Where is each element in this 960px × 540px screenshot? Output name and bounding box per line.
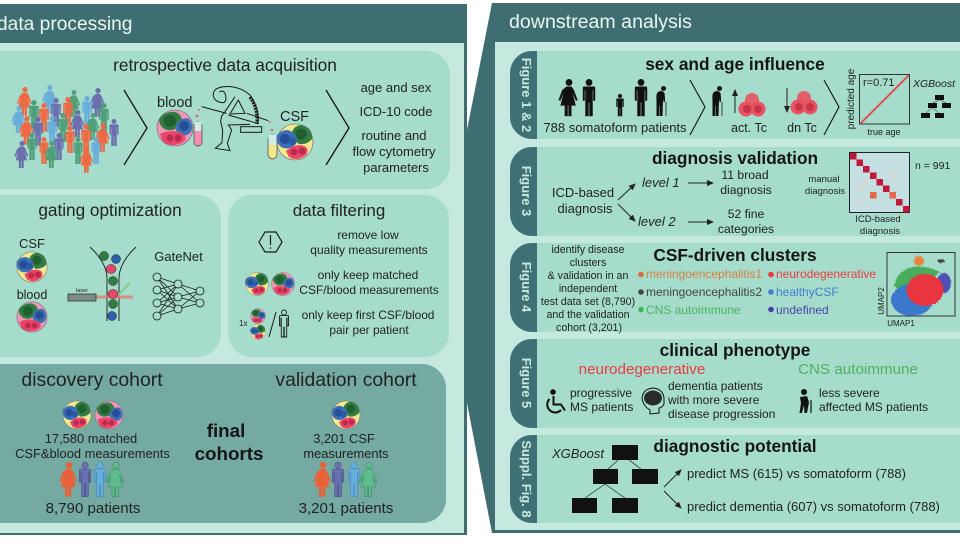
text: ICD-based diagnosis axis [855,214,901,237]
icon: patient undergoing lumbar puncture [202,86,268,151]
label: CNS autoimmune: CNS autoimmune [798,361,918,378]
text: ICD-based diagnosis axis: diagnosis [860,226,900,237]
text: 52 fine categories: categories [718,222,774,236]
collected parameters: ICD-10 code [360,104,432,119]
icon: head with brain [642,388,664,414]
icon: matched CSF cells [245,272,269,296]
icon: discovery cells [63,401,123,429]
heading: final cohorts [195,420,263,464]
text: dementia patients [667,379,775,421]
tab label: Figure 5: Figure 5 [519,358,534,408]
text: remove low quality measurements: remove low [337,228,399,242]
text: ICD-based diagnosis [552,185,614,216]
legend: clusters: CNS autoimmune [646,303,741,317]
text: only keep first pair [302,308,434,337]
icon: wheelchair [547,390,565,412]
text: ICD-based diagnosis axis: ICD-based [855,214,901,225]
text: manual diagnosis: diagnosis [805,186,845,197]
text: less severe: affected MS patients [819,400,928,414]
text: dementia patients: disease progression [668,407,775,421]
heading: diagnosis validation [652,148,818,168]
card: clinical phenotype [510,339,960,428]
diagram: decision tree [572,445,658,513]
heading: discovery cohort: discovery cohort [21,369,163,391]
text: 52 fine categories [718,207,774,236]
text: identify disease clusters: clusters [570,257,606,269]
icon: blood cells [157,110,193,146]
text: discovery measurements: 17,580 matched [45,431,137,446]
heading: clinical phenotype [660,340,811,360]
icon: blood tube [194,109,202,146]
arrow down [786,88,788,112]
text: validation measurements: 3,201 CSF [313,431,375,446]
icon: CSF cells [16,252,47,282]
card: final cohorts [0,364,446,523]
text: manual diagnosis: manual [808,174,840,185]
icon: dn T cells [790,91,818,114]
heading: validation cohort: validation cohort [275,369,417,391]
text: manual diagnosis [805,174,845,197]
icon: decision tree [921,95,951,118]
collected parameters: routine and [361,128,427,143]
legend: clusters [638,267,876,317]
label: blood: blood [157,95,192,111]
header bar: data processing [0,4,467,535]
text: identify disease clusters [541,244,635,334]
icon: CSF tube [268,121,277,159]
tab label: Suppl. Fig. 8: Suppl. Fig. 8 [519,440,534,518]
icon: CSF cells [276,124,313,160]
card: data filtering [228,195,449,357]
label: CSF: CSF [280,109,309,125]
collected parameters: age and sex [361,80,432,95]
heading: data processing: data processing [0,14,132,35]
text: only keep first pair: only keep first CSF/blood [302,308,434,322]
heading: final cohorts: cohorts [195,443,263,464]
text: identify disease clusters: and the validation [546,309,630,321]
card: gating optimization [0,195,221,357]
text: less severe [819,386,928,414]
collected parameters: parameters [363,160,429,175]
text: progressive MS patients: progressive [570,386,632,400]
text: progressive MS patients [570,386,633,414]
heading: data filtering: data filtering [293,201,385,220]
card: sex and age influence [510,51,960,139]
chart: UMAP: UMAP1 [887,319,915,328]
text: ICD-based diagnosis: diagnosis [558,201,613,216]
card: retrospective data acquisition [0,51,450,189]
text: validation measurements [303,431,389,461]
heading: downstream analysis: downstream analysis [509,11,692,33]
text: less severe: less severe [819,386,880,400]
collected parameters: flow cytometry [352,144,436,159]
text: remove low quality measurements: quality measurements [310,243,428,257]
text: discovery measurements [15,431,170,461]
icon: spine [250,97,257,124]
text: ICD-based diagnosis: ICD-based [552,185,614,200]
text: only keep matched: only keep matched [318,268,418,282]
text: level 1: level 1 [642,175,680,190]
heading: final cohorts: final [207,420,245,441]
text: 11 broad diagnosis: diagnosis [720,183,772,197]
label: XGBoost: XGBoost [551,446,605,461]
legend: clusters: meningoencephalitis1 [646,267,762,281]
label: GateNet: GateNet [154,249,203,264]
header and chevron frame [467,3,960,533]
icon: validation cells [332,401,360,429]
label: XGBoost: XGBoost [912,78,956,90]
label: 1x: 1x [239,319,247,328]
legend: clusters: healthyCSF [776,285,839,299]
slash [269,312,276,337]
collected parameters [352,80,436,175]
chevron [124,90,147,165]
tab label: Figure 3: Figure 3 [519,166,534,216]
text: remove low quality measurements [310,228,428,257]
arrows: levels [618,183,713,222]
label: blood: blood [17,288,47,302]
chevron [326,90,349,165]
chart: UMAP: UMAP2 [877,287,886,315]
heading: CSF-driven clusters [653,245,817,265]
heading: gating optimization: gating optimization [38,200,182,220]
diagram: flow cytometer: laser [76,288,88,294]
text: predict MS: predict MS (615) vs somatoform (788) [687,466,906,481]
card: diagnosis validation [510,147,960,237]
panel: data processing [0,4,467,535]
text: only keep first pair: pair per patient [329,323,409,337]
heading: retrospective data acquisition: retrospective data acquisition [113,55,337,75]
text: discovery measurements: CSF&blood measurements [15,446,170,461]
card: CSF-driven clusters [510,243,960,334]
legend: clusters: neurodegenerative [776,267,876,281]
text: 52 fine categories: 52 fine [728,207,765,221]
text: 11 broad diagnosis: 11 broad [721,168,769,182]
text: level 2: level 2 [638,214,676,229]
text: identify disease clusters: & validation in an [548,270,628,282]
text: dementia patients: with more severe [667,393,760,407]
text: only keep matched: CSF/blood measurements [299,283,439,297]
text: validation measurements: measurements [303,446,389,461]
text: predict dementia: predict dementia (607) vs somatoform (788) [687,499,940,514]
text: 3,201 patients: 3,201 patients [299,500,393,517]
legend: clusters: meningoencephalitis2 [646,285,762,299]
text: only keep matched [299,268,439,297]
text: dementia patients: dementia patients [668,379,763,393]
diagram: flow cytometer [68,247,136,321]
arrows: predictions [664,470,681,508]
label: dn Tc: dn Tc [787,121,817,135]
icon: discovery patients [59,462,124,497]
chart: predicted vs true age: predicted age [846,68,857,129]
text: identify disease clusters: identify disease [551,244,625,256]
text: 788 somatoform patients: 788 somatoform patients [543,120,687,135]
icon: blood cells [17,302,47,332]
icon: matched blood cells [271,272,295,296]
patient crowd [11,85,119,173]
chevron [690,80,705,135]
chart: predicted vs true age: r=0.71 [863,77,894,89]
arrow up [734,90,736,113]
icon: activated T cells [738,93,766,116]
text: identify disease clusters: test data set (8,790) [541,296,635,308]
card: diagnostic potential [510,435,960,523]
label: CSF: CSF [19,236,45,251]
chart: confusion matrix [850,152,910,212]
icon: somatoform patients [558,79,666,116]
text: identify disease clusters: cohort (3,201) [556,322,622,334]
heading: sex and age influence [645,54,825,74]
chart: predicted vs true age: true age [867,127,901,137]
text: n = 991: n = 991 [915,160,950,172]
text: 11 broad diagnosis [720,168,772,197]
legend: clusters: undefined [776,303,829,317]
icon: walking person [800,389,811,413]
tab label: Figure 1 & 2: Figure 1 & 2 [519,58,534,132]
label: act. Tc: act. Tc [731,121,767,135]
icon: elderly patient [712,86,722,116]
chevron [824,80,839,135]
panel: downstream analysis [467,3,960,533]
icon: sample pair [250,308,266,340]
heading: diagnostic potential [653,436,817,456]
icon: warning hexagon [259,232,282,252]
diagram: neural network [153,273,204,320]
tab label: Figure 4: Figure 4 [519,262,534,313]
text: progressive MS patients: MS patients [570,400,633,414]
icon: validation patients [313,462,377,497]
icon: patient outline [280,310,288,337]
chart: UMAP [877,252,955,328]
text: 8,790 patients: 8,790 patients [46,500,140,517]
text: identify disease clusters: independent [559,283,617,295]
label: neurodegenerative: neurodegenerative [579,361,705,378]
chart: predicted vs true age [846,68,910,137]
